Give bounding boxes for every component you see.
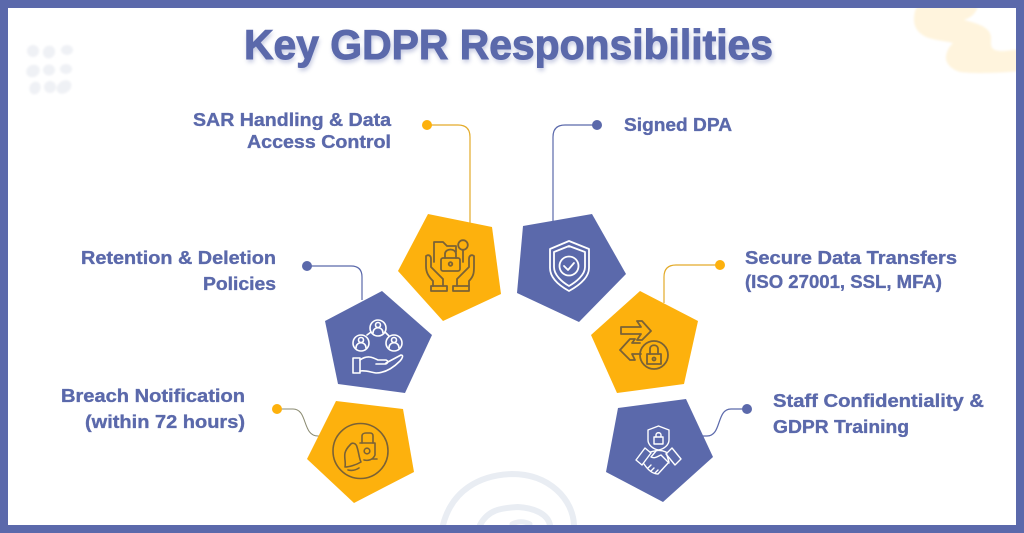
item: SAR handling: [193, 109, 501, 321]
icon: shield with check: [550, 241, 589, 291]
label: [745, 247, 957, 292]
label: [61, 385, 245, 432]
dot: [422, 120, 432, 130]
label: (ISO 27001, SSL, MFA): [745, 271, 942, 292]
dot: [742, 404, 752, 414]
label: Access Control: [247, 131, 391, 152]
label: Policies: [203, 273, 276, 294]
icon: handshake and shield: [636, 426, 681, 474]
label: Retention & Deletion: [81, 247, 276, 268]
label: [193, 109, 392, 152]
connector: [702, 409, 747, 436]
dot: [272, 404, 282, 414]
connector: [277, 409, 322, 436]
dot: [715, 260, 725, 270]
title: Key GDPR Responsibilities: [245, 24, 774, 71]
item: Breach notification: [61, 385, 414, 503]
label: Signed DPA: [624, 114, 732, 135]
pentagon: [398, 214, 501, 321]
label: GDPR Training: [773, 416, 909, 437]
pentagon: [606, 399, 713, 502]
icon: hand with people: [353, 320, 403, 373]
item: Signed DPA: [517, 114, 732, 322]
connector: [307, 266, 362, 300]
item: Staff confidentiality: [606, 390, 984, 502]
item: Retention: [81, 247, 432, 393]
label: (within 72 hours): [85, 411, 245, 432]
label: [773, 390, 984, 437]
connector: [664, 265, 720, 303]
decoration: dot grid: [24, 43, 74, 97]
label: SAR Handling & Data: [193, 109, 392, 130]
decoration: yellow squiggle: [914, 6, 1020, 73]
item: Secure Data Transfers: [591, 247, 957, 393]
title: Key GDPR Responsibilities: [244, 21, 773, 68]
label: Staff Confidentiality &: [773, 390, 984, 411]
icon: arrows and lock: [620, 321, 668, 369]
dot: [592, 120, 602, 130]
pentagon: [517, 214, 626, 322]
decoration: bottom spiral: [443, 474, 574, 525]
icon: hands, lock and key: [426, 240, 474, 291]
connector: [553, 125, 597, 222]
label: [81, 247, 276, 294]
label: Breach Notification: [61, 385, 245, 406]
pentagon: [325, 291, 432, 393]
connector: [427, 125, 470, 224]
dot: [302, 261, 312, 271]
pentagon: [307, 401, 414, 503]
label: Secure Data Transfers: [745, 247, 957, 268]
pentagon: [591, 291, 698, 393]
icon: bell and lock: [333, 424, 388, 478]
